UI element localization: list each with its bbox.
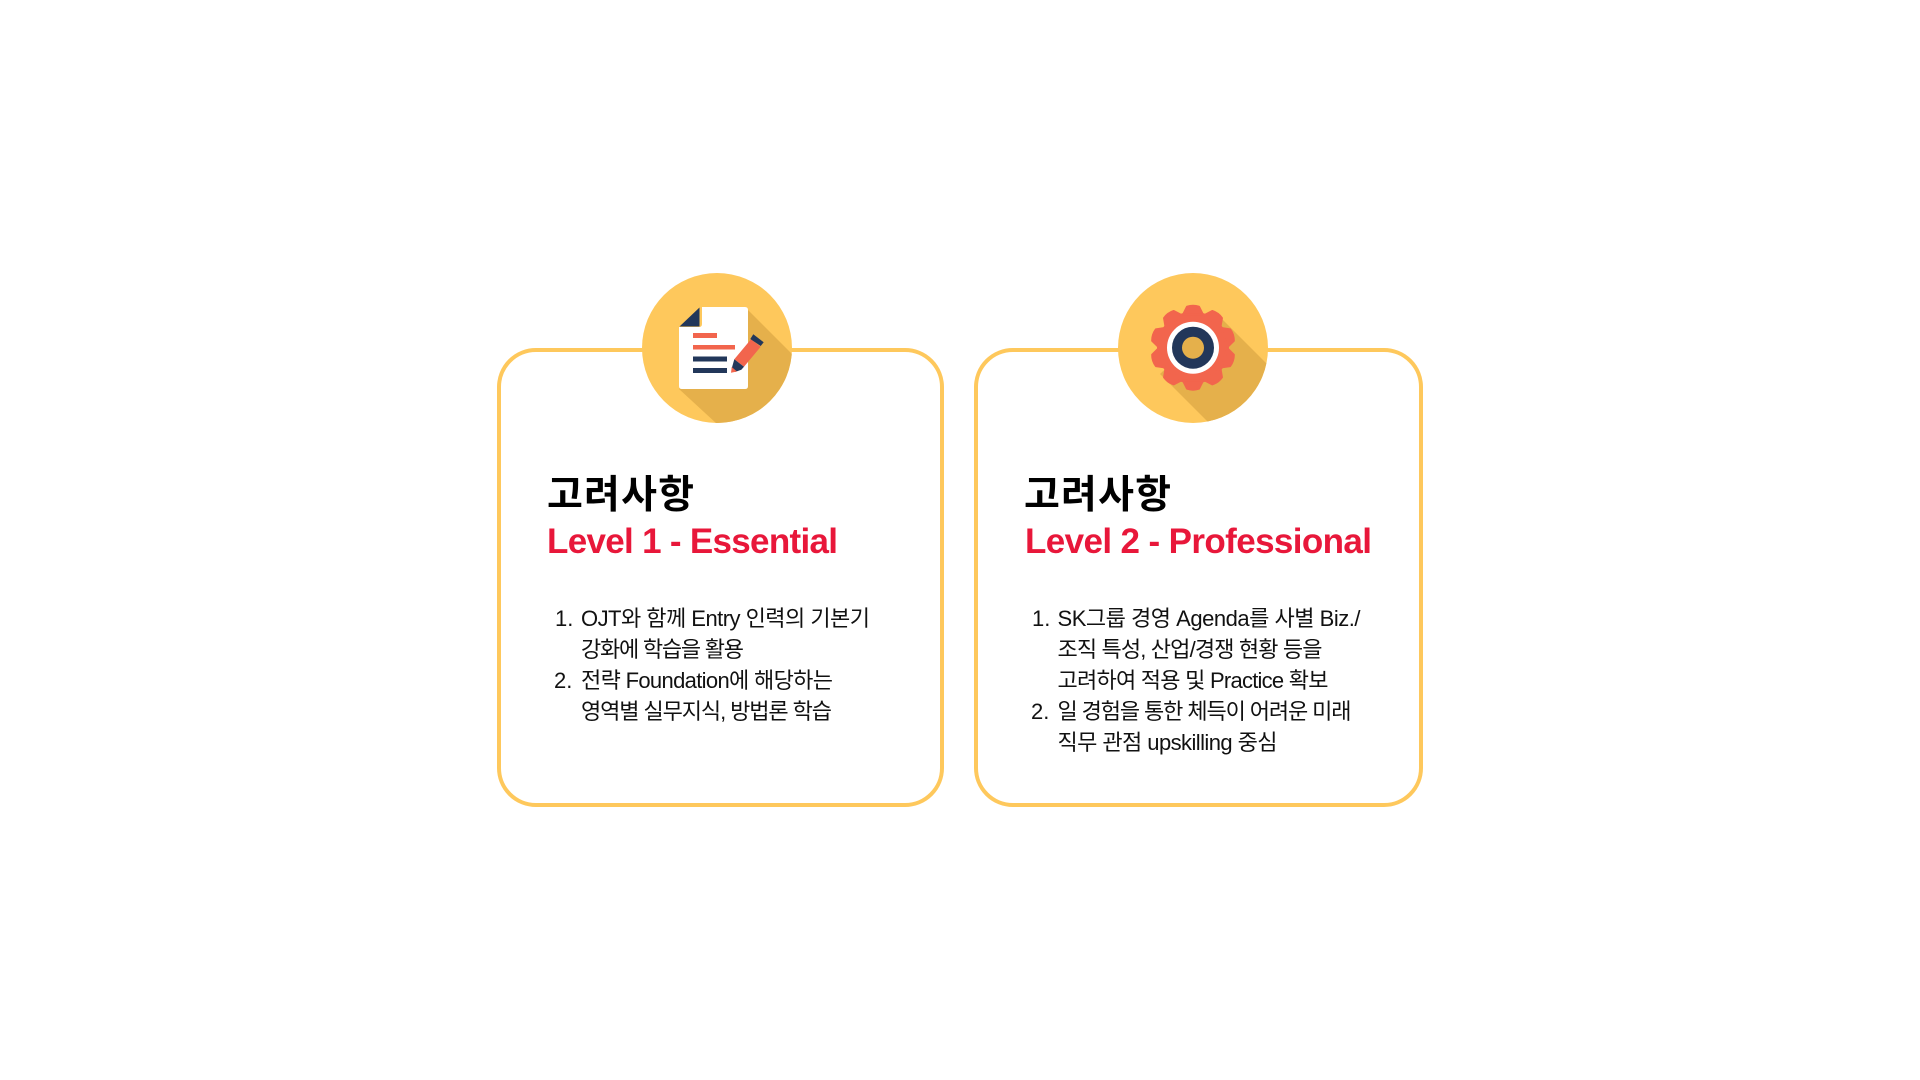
numbered list: OJT와 함께 Entry 인력의 기본기 — [581, 606, 870, 631]
numbered list: SK그룹 경영 Agenda를 사별 Biz./ — [1058, 606, 1361, 631]
numbered list: 1. — [555, 606, 573, 631]
numbered list: 조직 특성, 산업/경쟁 현황 등을 — [1058, 637, 1322, 662]
heading: 고려사항: 고려사항 — [547, 474, 694, 517]
card outline — [976, 350, 1421, 805]
numbered list: 강화에 학습을 활용 — [581, 637, 744, 662]
numbered list: 2. — [1031, 699, 1049, 724]
numbered list: 일 경험을 통한 체득이 어려운 미래 — [1058, 699, 1352, 724]
icon: document with pencil — [642, 273, 792, 423]
numbered list: 영역별 실무지식, 방법론 학습 — [581, 699, 832, 724]
numbered list — [554, 606, 870, 724]
subheading: Level 2 - Professional: Level 2 - Professional — [1025, 522, 1372, 561]
card outline — [499, 350, 942, 805]
panel: Level 1 card — [499, 273, 942, 805]
numbered list — [1031, 606, 1361, 755]
numbered list: 고려하여 적용 및 Practice 확보 — [1058, 668, 1328, 693]
subheading: Level 1 - Essential: Level 1 - Essential — [547, 522, 838, 561]
numbered list: 직무 관점 upskilling 중심 — [1058, 730, 1278, 755]
heading: 고려사항: 고려사항 — [1024, 474, 1171, 517]
numbered list: 전략 Foundation에 해당하는 — [581, 668, 833, 693]
panel: Level 2 card — [976, 273, 1421, 805]
numbered list: 1. — [1032, 606, 1050, 631]
numbered list: 2. — [554, 668, 572, 693]
icon: gear — [1118, 273, 1268, 423]
